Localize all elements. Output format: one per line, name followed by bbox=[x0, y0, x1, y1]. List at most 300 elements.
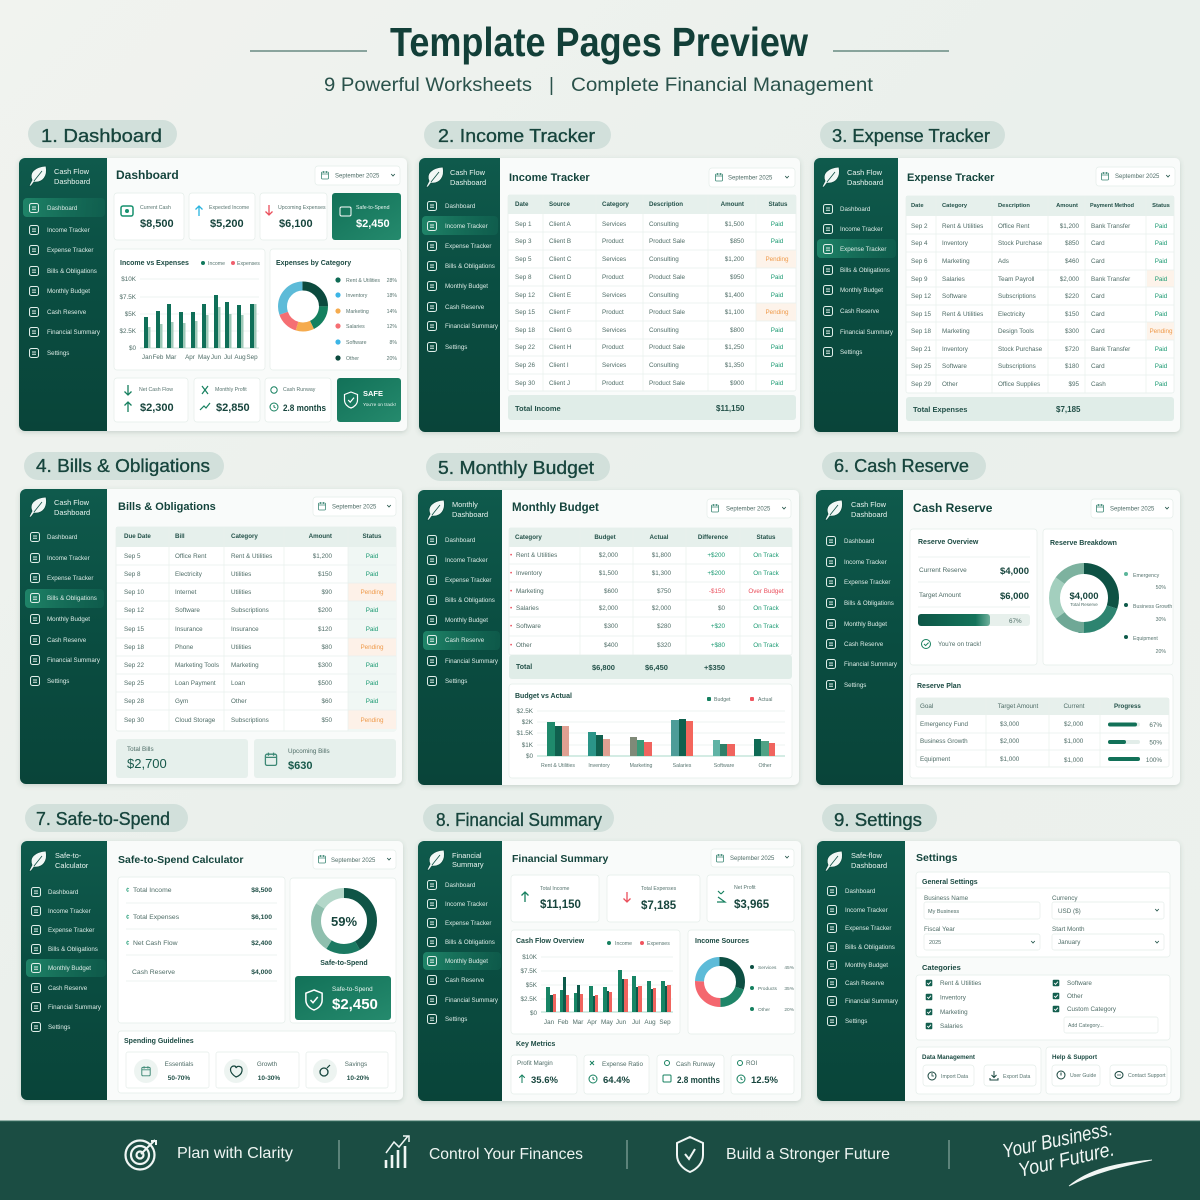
expense table: Paid bbox=[1155, 311, 1168, 318]
reserve overview card bbox=[910, 529, 1037, 665]
income table bbox=[508, 195, 796, 391]
bar chart: income vs expenses: May bbox=[198, 354, 211, 361]
expense table: Team Payroll bbox=[998, 276, 1034, 283]
income table: Product Sale bbox=[649, 309, 686, 316]
bar chart: income vs expenses: $2.5K bbox=[120, 328, 137, 335]
reserve breakdown donut: 50% bbox=[1156, 585, 1166, 591]
income table: $1,500 bbox=[725, 221, 744, 228]
sidebar: Income Tracker bbox=[445, 557, 488, 564]
budget table: • bbox=[510, 623, 512, 630]
bar chart: budget vs actual bbox=[509, 684, 792, 778]
expense table: Inventory bbox=[942, 240, 969, 247]
icon: shield check bbox=[677, 1137, 703, 1172]
stat card: cash runway bbox=[265, 378, 331, 422]
income table: Date bbox=[515, 201, 529, 208]
bills table: Software bbox=[175, 607, 200, 614]
help and support: Help & Support bbox=[1052, 1054, 1097, 1061]
calculation list card: $2,400 bbox=[251, 940, 272, 947]
bills table: Category bbox=[231, 533, 258, 540]
income table: Paid bbox=[771, 292, 784, 299]
bar chart: cash flow overview: Jan bbox=[544, 1019, 555, 1026]
budget table: Budget bbox=[594, 534, 616, 541]
sidebar: Cash Reserve bbox=[844, 641, 884, 648]
budget table: $1,800 bbox=[652, 552, 671, 559]
subtitle: 9 Powerful Worksheets bbox=[324, 74, 532, 96]
total row bbox=[508, 395, 796, 420]
bar chart: income vs expenses: $10K bbox=[121, 276, 137, 283]
donut gauge: 59% bbox=[290, 878, 396, 1023]
sidebar: Cash Reserve bbox=[48, 985, 88, 992]
sidebar: Settings bbox=[845, 1018, 867, 1025]
sidebar: Cash Flow bbox=[847, 168, 883, 177]
spending guidelines: 10-20% bbox=[347, 1075, 369, 1082]
section heading: 1. Dashboard bbox=[28, 120, 177, 148]
data management: Export Data bbox=[1003, 1074, 1031, 1080]
bar chart: cash flow overview: Sep bbox=[659, 1019, 671, 1026]
subtitle: | bbox=[549, 75, 554, 96]
calculation list card: ¢ bbox=[126, 940, 130, 947]
bills table: Marketing Tools bbox=[175, 662, 219, 669]
calculation list card: $8,500 bbox=[251, 887, 272, 894]
general settings form: USD ($) bbox=[1058, 908, 1081, 915]
sidebar bbox=[817, 841, 905, 1101]
budget table: $0 bbox=[718, 605, 725, 612]
donut gauge: 59%: 59% bbox=[331, 914, 357, 929]
sidebar: Monthly bbox=[452, 500, 478, 509]
bar chart: budget vs actual: $2.5K bbox=[517, 708, 534, 715]
donut chart: expenses by category: 14% bbox=[387, 309, 397, 315]
income table: Consulting bbox=[649, 292, 679, 299]
stat card: upcoming expenses bbox=[260, 193, 327, 240]
bills table: Other bbox=[231, 698, 247, 705]
reserve plan table bbox=[910, 674, 1173, 778]
bar chart: cash flow overview: $5K bbox=[526, 982, 538, 989]
calculation list card: Total Expenses bbox=[133, 914, 180, 921]
income table: Paid bbox=[771, 344, 784, 351]
heading: Bills & Obligations bbox=[118, 501, 216, 513]
stat card: safe-to-spend: $2,450 bbox=[356, 218, 390, 230]
bar chart: budget vs actual: Marketing bbox=[630, 763, 653, 769]
income table: Client A bbox=[549, 221, 572, 228]
budget table: • bbox=[510, 552, 512, 559]
bar chart: income vs expenses: Mar bbox=[166, 354, 176, 361]
bar chart: cash flow overview: Feb bbox=[558, 1019, 569, 1026]
heading: Expense Tracker bbox=[907, 172, 995, 184]
donut chart: income sources: Other bbox=[758, 1007, 770, 1013]
expense table: Marketing bbox=[942, 328, 970, 335]
general settings form: General Settings bbox=[922, 879, 978, 886]
help and support: User Guide bbox=[1070, 1073, 1096, 1079]
income table: $1,350 bbox=[725, 362, 744, 369]
sidebar: Calculator bbox=[55, 861, 89, 870]
stat card: expected income bbox=[189, 193, 255, 240]
expense table: Sep 4 bbox=[911, 240, 928, 247]
reserve plan table: Progress bbox=[1114, 703, 1141, 710]
bills table: Pending bbox=[360, 589, 384, 596]
reserve breakdown donut: Emergency bbox=[1133, 573, 1160, 579]
income table: Client G bbox=[549, 327, 572, 334]
reserve overview card: $4,000 bbox=[1000, 566, 1029, 577]
donut chart: income sources: Services bbox=[758, 965, 777, 971]
section heading: 6. Cash Reserve: 6. Cash Reserve bbox=[834, 455, 969, 476]
general settings form: Business Name bbox=[924, 895, 969, 902]
reserve breakdown donut: 20% bbox=[1156, 649, 1166, 655]
bar chart: budget vs actual: Salaries bbox=[673, 763, 692, 769]
status card: safe bbox=[337, 378, 401, 422]
build a stronger future: Build a Stronger Future bbox=[726, 1146, 890, 1163]
stat card: total expenses: Total Expenses bbox=[641, 886, 677, 892]
stat card: expected income: $5,200 bbox=[210, 218, 244, 230]
sidebar: Monthly Budget bbox=[48, 965, 91, 972]
general settings form: Fiscal Year bbox=[924, 926, 955, 933]
expense table: Sep 18 bbox=[911, 328, 931, 335]
section heading: 5. Monthly Budget: 5. Monthly Budget bbox=[438, 457, 594, 478]
stat card: current cash: Current Cash bbox=[140, 205, 171, 211]
data management bbox=[916, 1047, 1041, 1094]
bills table: Gym bbox=[175, 698, 188, 705]
donut chart: income sources: Income Sources bbox=[695, 938, 749, 945]
sidebar: Expense Tracker bbox=[844, 579, 890, 586]
sidebar: Bills & Obligations bbox=[47, 595, 97, 602]
donut chart: expenses by category: Salaries bbox=[346, 324, 365, 330]
date picker: September 2025 bbox=[1110, 506, 1155, 512]
expense table: Salaries bbox=[942, 276, 965, 283]
total row: $6,800 bbox=[592, 663, 615, 672]
spending guidelines: 10-30% bbox=[258, 1075, 280, 1082]
key metrics bbox=[511, 1041, 794, 1094]
date picker bbox=[313, 850, 396, 869]
budget table: +$80 bbox=[711, 642, 725, 649]
stat card: expected income: Expected Income bbox=[209, 205, 249, 211]
stat card: total expenses bbox=[607, 875, 700, 922]
upcoming bills card: Upcoming Bills bbox=[288, 748, 330, 755]
bills table: Cloud Storage bbox=[175, 717, 216, 724]
sidebar: Bills & Obligations bbox=[445, 597, 495, 604]
bills table: Status bbox=[363, 533, 382, 540]
sidebar: Bills & Obligations bbox=[840, 267, 890, 274]
bills table: Paid bbox=[366, 680, 379, 687]
budget table: On Track bbox=[753, 642, 780, 649]
expense table: Subscriptions bbox=[998, 293, 1036, 300]
expense table: Paid bbox=[1155, 381, 1168, 388]
donut chart: income sources: 45% bbox=[784, 965, 795, 971]
stat card: current cash bbox=[114, 193, 184, 240]
sidebar: Expense Tracker bbox=[47, 247, 93, 254]
expense table: Sep 9 bbox=[911, 276, 928, 283]
spending guidelines: 50-70% bbox=[168, 1075, 190, 1082]
expense table: Card bbox=[1091, 311, 1105, 318]
sidebar: Cash Flow bbox=[54, 498, 90, 507]
income table: Consulting bbox=[649, 256, 679, 263]
sidebar: Financial Summary bbox=[844, 661, 898, 668]
categories: Salaries bbox=[940, 1023, 963, 1030]
expense table: Design Tools bbox=[998, 328, 1034, 335]
expense table: $850 bbox=[1065, 240, 1079, 247]
sidebar: Bills & Obligations bbox=[47, 268, 97, 275]
sidebar: Cash Reserve bbox=[840, 308, 880, 315]
total row: Total Expenses bbox=[913, 405, 967, 414]
date picker bbox=[1091, 499, 1173, 518]
bills table: $80 bbox=[321, 644, 332, 651]
expense table: Inventory bbox=[942, 346, 969, 353]
donut chart: income sources: 20% bbox=[784, 1007, 795, 1013]
section heading: 3. Expense Tracker: 3. Expense Tracker bbox=[832, 125, 990, 146]
section heading: 4. Bills & Obligations bbox=[24, 452, 224, 480]
bills table: Paid bbox=[366, 626, 379, 633]
donut chart: expenses by category bbox=[270, 249, 401, 370]
calculation list card: Total Income bbox=[133, 887, 172, 894]
income table: Product bbox=[602, 274, 624, 281]
bills table: Subscriptions bbox=[231, 717, 269, 724]
reserve breakdown donut: Reserve Breakdown bbox=[1050, 540, 1117, 547]
expense table: Stock Purchase bbox=[998, 240, 1043, 247]
key metrics: Expense Ratio bbox=[602, 1061, 643, 1068]
bills table: Sep 30 bbox=[124, 717, 144, 724]
calculation list card: Cash Reserve bbox=[132, 969, 175, 976]
bills table: Internet bbox=[175, 589, 197, 596]
expense table: Rent & Utilities bbox=[942, 311, 983, 318]
budget table: +$200 bbox=[707, 570, 725, 577]
income table: $950 bbox=[730, 274, 744, 281]
donut chart: expenses by category: Rent & Utilities bbox=[346, 278, 380, 284]
categories: Custom Category bbox=[1067, 1006, 1117, 1013]
budget table: $1,500 bbox=[599, 570, 618, 577]
general settings form: Currency bbox=[1052, 895, 1078, 902]
income table: Client D bbox=[549, 274, 572, 281]
total row: Total bbox=[516, 664, 532, 671]
budget table: On Track bbox=[753, 552, 780, 559]
bar chart: income vs expenses: Income bbox=[208, 261, 225, 267]
sidebar: Settings bbox=[47, 678, 69, 685]
income table: Sep 5 bbox=[515, 256, 532, 263]
reserve overview card: Reserve Overview bbox=[918, 539, 979, 546]
income table: Paid bbox=[771, 380, 784, 387]
expense table: Paid bbox=[1155, 293, 1168, 300]
sidebar: Cash Reserve bbox=[47, 309, 87, 316]
reserve plan table: 100% bbox=[1146, 757, 1162, 764]
expense table: Paid bbox=[1155, 276, 1168, 283]
sidebar: Dashboard bbox=[851, 861, 887, 870]
stat card: total income bbox=[511, 875, 599, 922]
reserve plan table: $2,000 bbox=[1064, 721, 1084, 728]
sidebar: Dashboard bbox=[445, 203, 476, 210]
sidebar: Financial Summary bbox=[47, 657, 101, 664]
bills table: Paid bbox=[366, 553, 379, 560]
income table: Consulting bbox=[649, 221, 679, 228]
bills table: Utilities bbox=[231, 589, 251, 596]
bills table: Bill bbox=[175, 533, 185, 540]
bills table bbox=[116, 527, 396, 731]
bar chart: income vs expenses: $0 bbox=[129, 345, 136, 352]
sidebar: Summary bbox=[452, 860, 484, 869]
bills table: Paid bbox=[366, 662, 379, 669]
date picker bbox=[711, 849, 794, 867]
expense table: Paid bbox=[1155, 346, 1168, 353]
sidebar: Dashboard bbox=[445, 537, 476, 544]
bills table: Rent & Utilities bbox=[231, 553, 272, 560]
bills table: Paid bbox=[366, 571, 379, 578]
income table: $1,250 bbox=[725, 344, 744, 351]
key metrics: Cash Runway bbox=[676, 1061, 716, 1068]
sidebar: Dashboard bbox=[54, 508, 90, 517]
categories: Marketing bbox=[940, 1009, 968, 1016]
sidebar: Monthly Budget bbox=[840, 287, 883, 294]
stat card: safe-to-spend bbox=[332, 193, 401, 240]
budget table: Over Budget bbox=[748, 588, 784, 595]
heading: Dashboard bbox=[116, 168, 179, 182]
income table: Pending bbox=[765, 309, 789, 316]
upcoming bills card: $630 bbox=[288, 760, 312, 772]
bar chart: cash flow overview: $2.5K bbox=[521, 996, 538, 1003]
bar chart: cash flow overview: Expenses bbox=[647, 941, 670, 947]
bills table: $90 bbox=[321, 589, 332, 596]
total row bbox=[509, 655, 792, 679]
categories bbox=[916, 963, 1170, 1040]
date picker bbox=[707, 499, 791, 518]
donut chart: expenses by category: Inventory bbox=[346, 293, 368, 299]
income table: Services bbox=[602, 362, 626, 369]
sidebar: Monthly Budget bbox=[445, 283, 488, 290]
sidebar: Cash Reserve bbox=[445, 637, 485, 644]
expense table: Subscriptions bbox=[998, 363, 1036, 370]
sidebar: Dashboard bbox=[847, 178, 883, 187]
expense table: $1,200 bbox=[1060, 223, 1079, 230]
sidebar: Cash Flow bbox=[450, 168, 486, 177]
plan with clarity: Plan with Clarity bbox=[177, 1145, 293, 1162]
date picker: September 2025 bbox=[726, 506, 771, 512]
expense table: Paid bbox=[1155, 258, 1168, 265]
income table: Consulting bbox=[649, 362, 679, 369]
calculation list card: ¢ bbox=[126, 887, 130, 894]
expense table: Sep 25 bbox=[911, 363, 931, 370]
tagline bbox=[1000, 1118, 1152, 1186]
tagline: Your Business. bbox=[1000, 1118, 1115, 1163]
general settings form bbox=[916, 872, 1170, 957]
sidebar: Financial Summary bbox=[845, 998, 899, 1005]
sidebar: Safe-flow bbox=[851, 851, 882, 860]
calculation list card: ¢ bbox=[126, 914, 130, 921]
sidebar: Monthly Budget bbox=[47, 616, 90, 623]
bills table: Pending bbox=[360, 644, 384, 651]
donut chart: expenses by category: 18% bbox=[387, 293, 397, 299]
sidebar: Expense Tracker bbox=[48, 927, 94, 934]
donut chart: expenses by category: 20% bbox=[387, 356, 397, 362]
bills table: Insurance bbox=[175, 626, 203, 633]
expense table: Payment Method bbox=[1090, 203, 1134, 209]
donut chart: expenses by category: Expenses by Category bbox=[276, 260, 351, 267]
budget table: $320 bbox=[657, 642, 671, 649]
expense table: $720 bbox=[1065, 346, 1079, 353]
expense table: Card bbox=[1091, 240, 1105, 247]
status card: safe: SAFE bbox=[363, 389, 383, 398]
sidebar: Dashboard bbox=[845, 888, 876, 895]
sidebar: Settings bbox=[844, 682, 866, 689]
control your finances: Control Your Finances bbox=[429, 1146, 583, 1163]
expense table: $460 bbox=[1065, 258, 1079, 265]
bar chart: budget vs actual: $1.5K bbox=[517, 730, 534, 737]
spending guidelines: Essentials bbox=[165, 1061, 193, 1068]
bills table: Loan Payment bbox=[175, 680, 216, 687]
bar chart: cash flow overview: $7.5K bbox=[521, 968, 538, 975]
budget table: $400 bbox=[604, 642, 618, 649]
donut chart: income sources: Products bbox=[758, 986, 778, 992]
heading: Financial Summary bbox=[512, 853, 608, 865]
bar chart: income vs expenses: Jan bbox=[142, 354, 153, 361]
expense table: Sep 29 bbox=[911, 381, 931, 388]
spending guidelines bbox=[118, 1031, 396, 1093]
stat card: total income: Total Income bbox=[540, 886, 570, 892]
income table: Services bbox=[602, 292, 626, 299]
section heading: 3. Expense Tracker bbox=[820, 121, 1005, 149]
sidebar: Income Tracker bbox=[844, 559, 887, 566]
safe-to-spend result card: $2,450 bbox=[332, 996, 378, 1013]
calculation list card: $6,100 bbox=[251, 914, 272, 921]
income table: Product Sale bbox=[649, 274, 686, 281]
sidebar: Dashboard bbox=[840, 206, 871, 213]
expense table: $220 bbox=[1065, 293, 1079, 300]
income table: $1,100 bbox=[725, 309, 744, 316]
safe-to-spend result card: Safe-to-Spend bbox=[332, 986, 373, 993]
budget table: -$150 bbox=[709, 588, 725, 595]
income table: Pending bbox=[765, 256, 789, 263]
sidebar bbox=[814, 158, 898, 432]
expense table: Paid bbox=[1155, 363, 1168, 370]
stat card: net profit: $3,965 bbox=[734, 899, 770, 911]
general settings form: Start Month bbox=[1052, 926, 1085, 933]
total bills card bbox=[116, 739, 248, 778]
budget table: • bbox=[510, 570, 512, 577]
expense table: Software bbox=[942, 363, 967, 370]
income table: Sep 15 bbox=[515, 309, 535, 316]
bills table: $500 bbox=[318, 680, 332, 687]
income table: $900 bbox=[730, 380, 744, 387]
sidebar: Income Tracker bbox=[47, 227, 90, 234]
budget table: On Track bbox=[753, 605, 780, 612]
bar chart: budget vs actual: Actual bbox=[758, 697, 772, 703]
bar chart: income vs expenses: $7.5K bbox=[120, 294, 137, 301]
donut gauge: 59%: Safe-to-Spend bbox=[320, 960, 368, 967]
sidebar: Dashboard bbox=[47, 205, 78, 212]
budget table: $600 bbox=[604, 588, 618, 595]
sidebar bbox=[816, 490, 903, 785]
sidebar: Financial bbox=[452, 851, 482, 860]
section heading: 6. Cash Reserve bbox=[822, 452, 986, 480]
icon: growth chart bbox=[386, 1136, 409, 1168]
budget table: Status bbox=[757, 534, 776, 541]
stat card: upcoming expenses: $6,100 bbox=[279, 218, 313, 230]
sidebar bbox=[418, 490, 502, 785]
income table: Services bbox=[602, 221, 626, 228]
bills table: Phone bbox=[175, 644, 194, 651]
income table: $850 bbox=[730, 238, 744, 245]
bar chart: cash flow overview: Jun bbox=[616, 1019, 627, 1026]
income table: Client E bbox=[549, 292, 571, 299]
spending guidelines: Growth bbox=[257, 1061, 278, 1068]
bills table: $50 bbox=[321, 717, 332, 724]
expense table: Software bbox=[942, 293, 967, 300]
budget table bbox=[509, 528, 792, 655]
budget table: Salaries bbox=[516, 605, 539, 612]
reserve breakdown donut: Total Reserve bbox=[1070, 602, 1098, 607]
budget table: $2,000 bbox=[652, 605, 671, 612]
bills table: Utilities bbox=[231, 644, 251, 651]
sidebar: Income Tracker bbox=[840, 226, 883, 233]
sidebar bbox=[21, 841, 107, 1100]
reserve overview card: $6,000 bbox=[1000, 591, 1029, 602]
reserve plan table: Goal bbox=[920, 703, 933, 710]
reserve overview card: Target Amount bbox=[919, 592, 961, 599]
expense table: Ads bbox=[998, 258, 1009, 265]
